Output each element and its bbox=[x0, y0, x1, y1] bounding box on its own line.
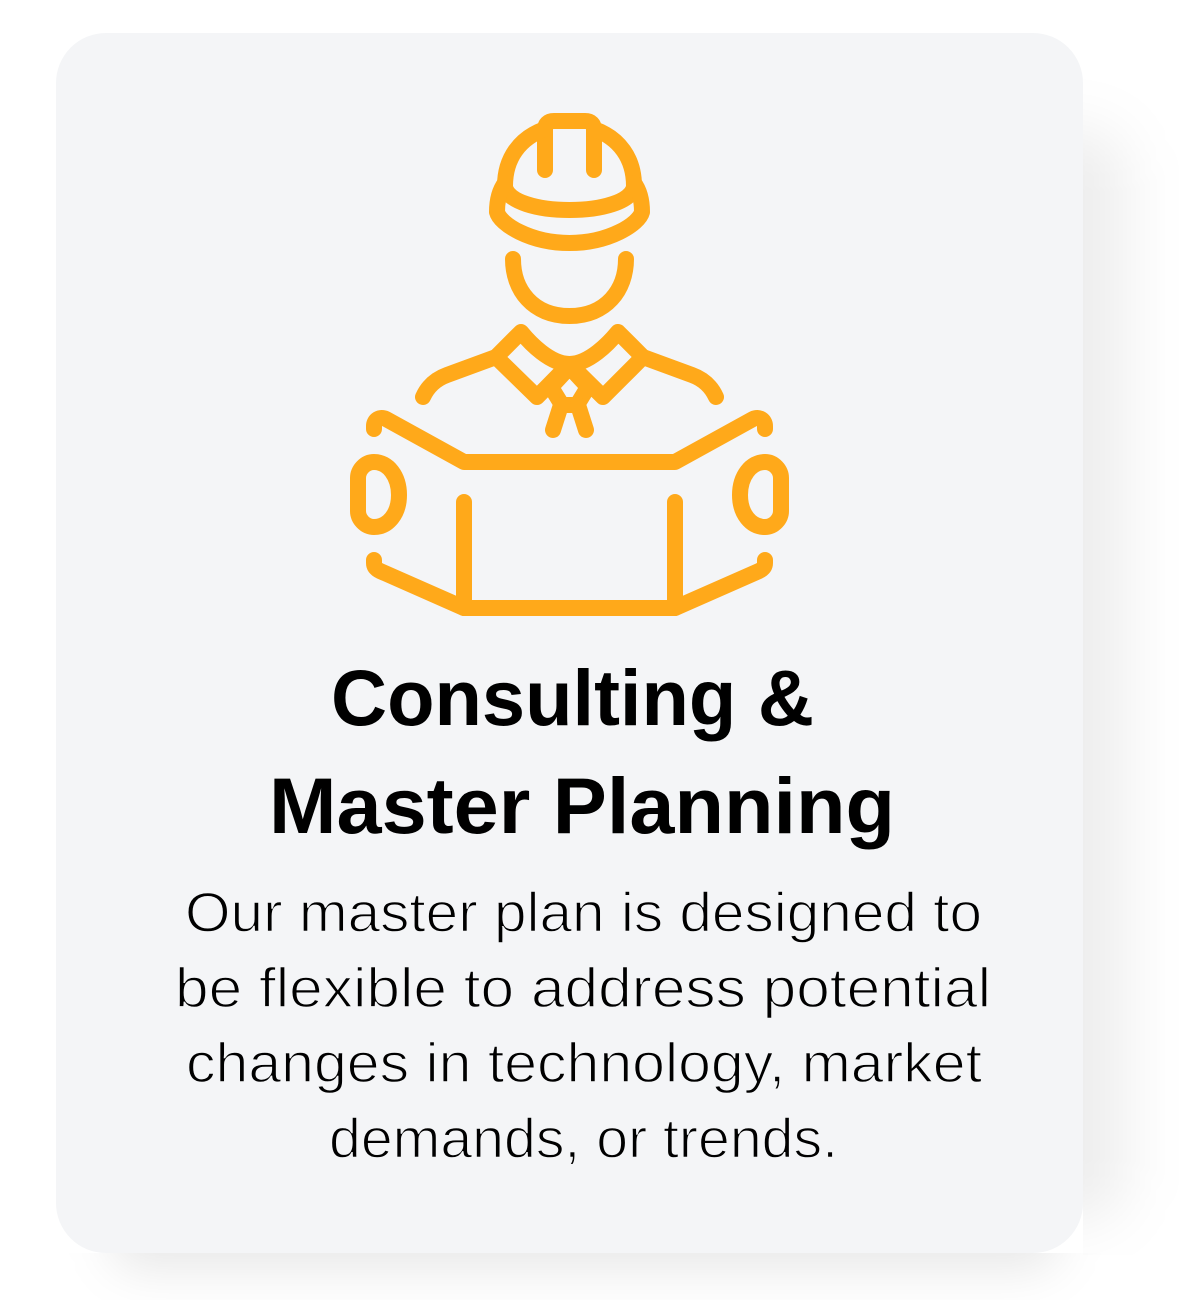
icon part: shoulders bbox=[423, 357, 716, 397]
body text bbox=[175, 880, 991, 1170]
icon part: hard hat bbox=[497, 121, 642, 243]
heading: Consulting & bbox=[331, 653, 814, 742]
icon: engineer with hard hat reading blueprint bbox=[358, 121, 781, 608]
icon part: face bbox=[513, 259, 626, 316]
body text: Our master plan is designed to bbox=[185, 880, 982, 944]
body text: demands, or trends. bbox=[329, 1106, 838, 1170]
heading bbox=[269, 653, 895, 850]
body text: be flexible to address potential bbox=[175, 956, 991, 1019]
icon part: collar and tie bbox=[496, 332, 643, 430]
heading: Master Planning bbox=[269, 761, 895, 850]
icon part: blueprint bbox=[358, 418, 781, 608]
body text: changes in technology, market bbox=[186, 1031, 982, 1094]
